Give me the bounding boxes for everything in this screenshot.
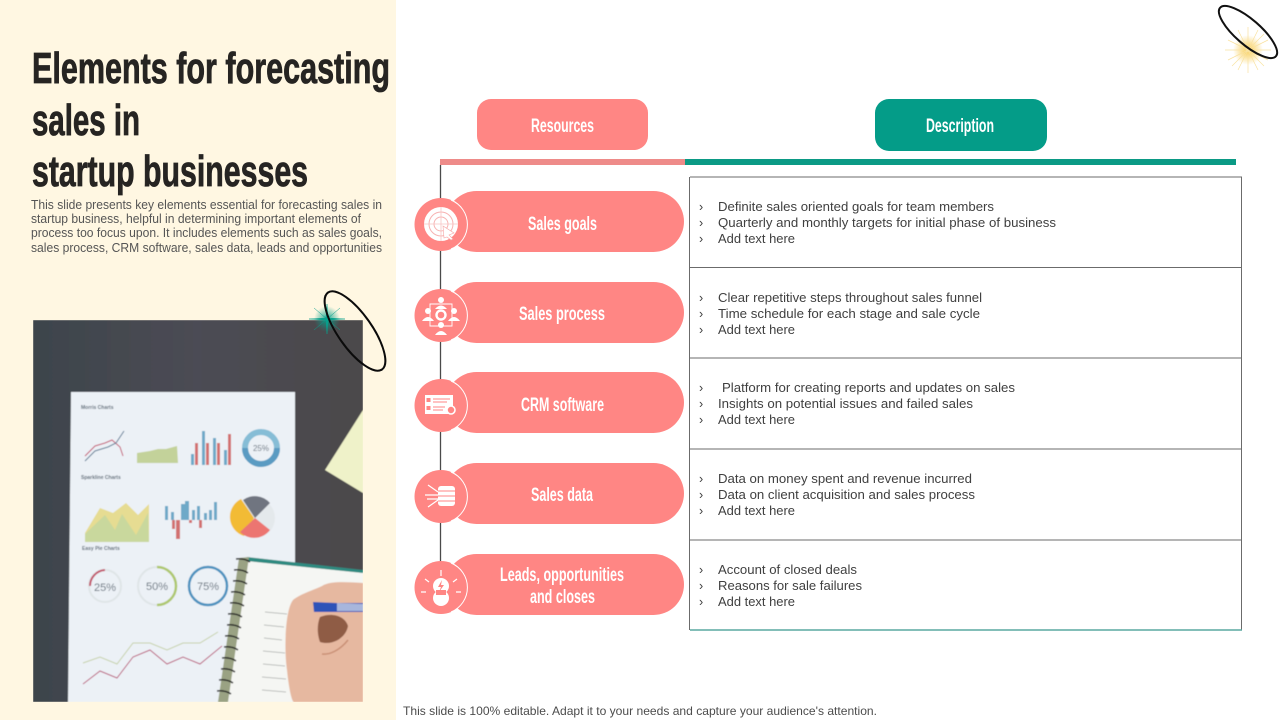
row 3 description: Platform for creating reports and updates on sales (722, 381, 1015, 395)
row 2 description: Time schedule for each stage and sale cycle (718, 307, 980, 321)
left cream panel (0, 0, 396, 720)
hand (285, 582, 363, 702)
row 1: Sales goals: Sales goals (528, 214, 597, 235)
row 2 description: Add text here (718, 323, 795, 337)
row 1 description: Quarterly and monthly targets for initial phase of business (718, 216, 1056, 230)
intro text block: process too focus upon. It includes elements such as sales goals, (31, 226, 382, 240)
title (32, 44, 390, 196)
photo: hand writing beside printed charts: Easy Pie Charts (82, 546, 120, 552)
row 5: Leads, opportunities and closes: Leads, opportunities (500, 565, 624, 586)
icon: server form with gear (425, 395, 455, 414)
row 3 description (699, 381, 1015, 427)
icon: light bulb on gear (421, 570, 461, 606)
row 1: Sales goals (414, 191, 684, 252)
description table (690, 177, 1242, 630)
header rule (440, 159, 1236, 165)
row 3: CRM software: CRM software (521, 395, 604, 416)
row 2: Sales process: Sales process (519, 304, 605, 325)
icon: team around gear (422, 297, 460, 335)
decoration: yellow star with black ellipse (1212, 0, 1280, 73)
row 2 description: › (699, 307, 703, 321)
photo: hand writing beside printed charts: Sparkline Charts (81, 475, 121, 481)
row 1 description: › (699, 200, 703, 214)
footer note: This slide is 100% editable. Adapt it to your needs and capture your audience's attention. (403, 704, 877, 718)
row 4: Sales data (414, 463, 684, 524)
row 4 description: › (699, 488, 703, 502)
row 3: CRM software (414, 372, 684, 433)
intro text block: startup business, helpful in determining important elements of (31, 212, 362, 226)
row 5 description: Reasons for sale failures (718, 579, 862, 593)
heading pill: Description (875, 99, 1047, 151)
row 5: Leads, opportunities and closes (414, 554, 684, 615)
row 2 description (699, 291, 982, 337)
row 5 description: › (699, 595, 703, 609)
photo: hand writing beside printed charts: 50% (146, 581, 168, 593)
intro text block (31, 198, 382, 255)
heading pill: Description: Description (926, 116, 994, 137)
row 5 description (699, 563, 862, 609)
row 1 description: Definite sales oriented goals for team members (718, 200, 994, 214)
row 5 description: Add text here (718, 595, 795, 609)
intro text block: This slide presents key elements essential for forecasting sales in (31, 198, 382, 212)
row 1 description: › (699, 216, 703, 230)
row 3 description: › (699, 413, 703, 427)
row 2: Sales process (414, 282, 684, 343)
photo: hand writing beside printed charts: 25% (94, 582, 116, 594)
timeline connector (440, 165, 442, 590)
row 5 description: › (699, 563, 703, 577)
row 3 description: › (699, 397, 703, 411)
row 4 description: Data on client acquisition and sales process (718, 488, 975, 502)
photo: hand writing beside printed charts: 25% (253, 444, 269, 453)
row 2 description: › (699, 323, 703, 337)
title: sales in (32, 96, 140, 145)
row 1 description: Add text here (718, 232, 795, 246)
row 4 description: › (699, 472, 703, 486)
row 2 description: Clear repetitive steps throughout sales funnel (718, 291, 982, 305)
row 4 description (699, 472, 975, 518)
row 1 description (699, 200, 1056, 246)
decoration: teal star with black ellipse (309, 283, 396, 379)
row 5: Leads, opportunities and closes: and closes (530, 587, 595, 608)
row 5 description: Account of closed deals (718, 563, 857, 577)
row 2 description: › (699, 291, 703, 305)
heading pill: Resources (477, 99, 648, 150)
row 1 description: › (699, 232, 703, 246)
row 3 description: Add text here (718, 413, 795, 427)
photo: hand writing beside printed charts (33, 320, 363, 702)
title: startup businesses (32, 147, 308, 196)
intro text block: sales process, CRM software, sales data, leads and opportunities (31, 241, 382, 255)
title: Elements for forecasting (32, 44, 390, 93)
icon: target with cursor (424, 207, 458, 241)
row 4 description: Add text here (718, 504, 795, 518)
row 3 description: Insights on potential issues and failed sales (718, 397, 973, 411)
row 3 description: › (699, 381, 703, 395)
row 4 description: › (699, 504, 703, 518)
heading pill: Resources: Resources (531, 116, 594, 137)
photo: hand writing beside printed charts: Morris Charts (81, 405, 114, 411)
row 4: Sales data: Sales data (531, 485, 593, 506)
row 5 description: › (699, 579, 703, 593)
row 4 description: Data on money spent and revenue incurred (718, 472, 972, 486)
photo: hand writing beside printed charts: 75% (197, 581, 219, 593)
icon: database with data lines (425, 485, 455, 507)
